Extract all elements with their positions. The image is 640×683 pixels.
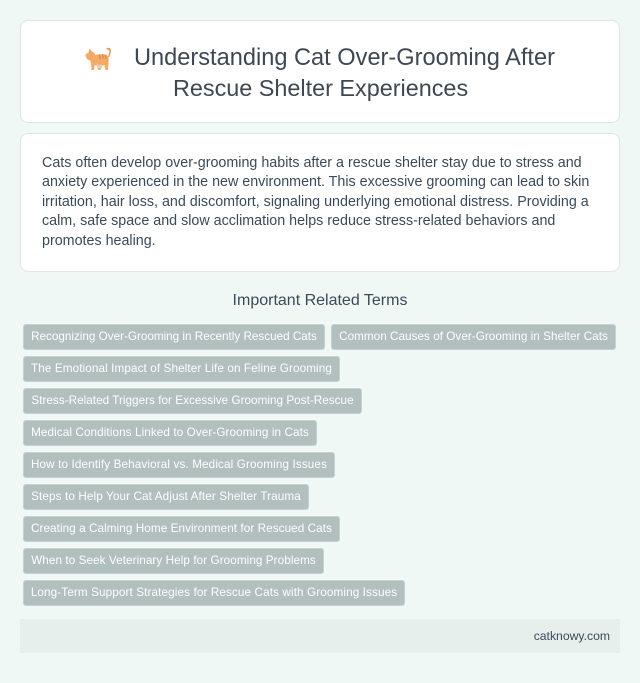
title: Rescue Shelter Experiences [173, 75, 468, 101]
tag [23, 516, 340, 542]
panel: intro card [20, 133, 620, 272]
intro paragraph: irritation, hair loss, and discomfort, signaling underlying emotional distress. Providing a [42, 194, 589, 210]
tag: The Emotional Impact of Shelter Life on Feline Grooming [31, 362, 332, 375]
title: Understanding Cat Over-Grooming After [134, 45, 555, 71]
tag: Steps to Help Your Cat Adjust After Shelter Trauma [31, 490, 301, 503]
tag [23, 420, 317, 446]
icon: cat [86, 48, 112, 70]
tag: Recognizing Over-Grooming in Recently Rescued Cats [31, 330, 317, 343]
tag: When to Seek Veterinary Help for Grooming Problems [31, 554, 316, 567]
tag [23, 356, 340, 382]
panel: title card [20, 20, 620, 123]
tag [23, 548, 324, 574]
tag: Medical Conditions Linked to Over-Grooming in Cats [31, 426, 309, 439]
intro paragraph: anxiety experienced in the new environment. This excessive grooming can lead to skin [42, 174, 589, 190]
tag: Long-Term Support Strategies for Rescue Cats with Grooming Issues [31, 586, 397, 599]
tag: Stress-Related Triggers for Excessive Grooming Post-Rescue [31, 394, 354, 407]
heading: related terms: Important Related Terms [233, 292, 407, 309]
tag [23, 452, 335, 478]
tag: Creating a Calming Home Environment for Rescued Cats [31, 522, 332, 535]
tag: Common Causes of Over-Grooming in Shelter Cats [339, 330, 608, 343]
intro paragraph: Cats often develop over-grooming habits after a rescue shelter stay due to stress and [42, 155, 582, 171]
tag list [23, 324, 616, 606]
intro paragraph: calm, safe space and slow acclimation helps reduce stress-related behaviors and [42, 213, 555, 229]
tag [23, 484, 309, 510]
intro paragraph: promotes healing. [42, 233, 156, 249]
tag [23, 388, 362, 414]
tag [23, 324, 325, 350]
intro paragraph [42, 155, 589, 249]
title [134, 45, 555, 101]
tag: How to Identify Behavioral vs. Medical Grooming Issues [31, 458, 327, 471]
tag [23, 580, 405, 606]
footer credit: catknowy.com [534, 629, 610, 643]
tag [331, 324, 616, 350]
footer bar [20, 619, 620, 653]
